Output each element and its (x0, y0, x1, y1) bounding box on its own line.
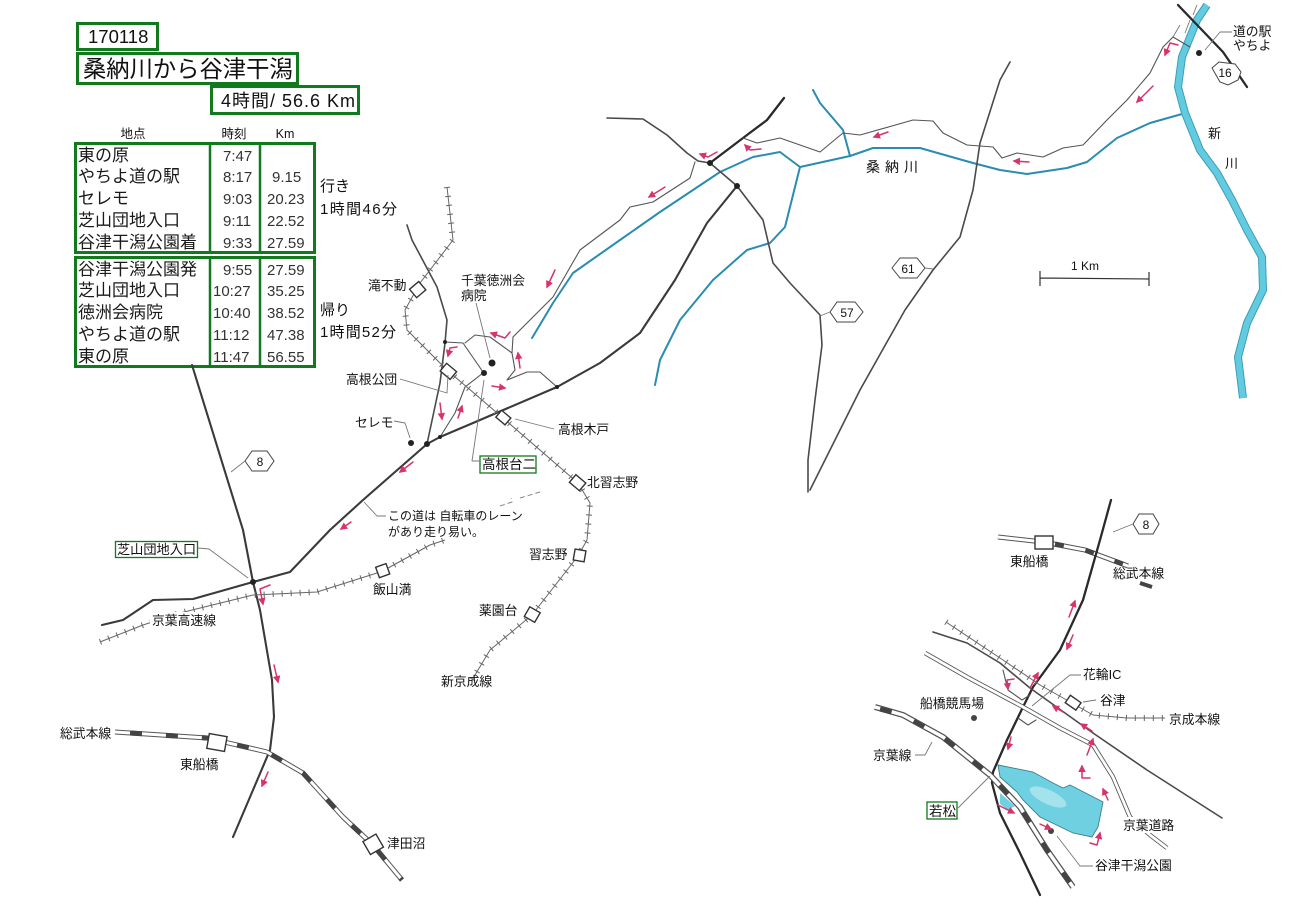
route 57 shield (820, 302, 863, 322)
label: Kita-Narashino: 北習志野 (587, 475, 638, 490)
road: route 16 side lanes (1173, 5, 1197, 37)
route 57 shield: 57 (840, 306, 854, 320)
return table: 35.25 (267, 283, 305, 300)
label: Yatsu (1083, 693, 1126, 708)
outbound duration note (320, 178, 397, 218)
return table: 徳洲会病院 (78, 303, 163, 322)
inset map: Yatsu tidal flat (873, 500, 1222, 895)
label: Sobu line inset: 総武本線 (1113, 566, 1164, 581)
return table: 56.55 (267, 349, 305, 366)
label: Shibayama entrance: 芝山団地入口 (117, 542, 196, 557)
road: diagonal road (933, 632, 1222, 818)
label: Takanedai 2 (472, 380, 536, 473)
outbound table: 7:47 (223, 148, 252, 165)
outbound table: 谷津干潟公園着 (78, 233, 197, 252)
label: Takane Kodan: 高根公団 (346, 372, 397, 387)
label: bike lane note: この道は 自転車のレーン (388, 509, 523, 523)
outbound table: 9:33 (223, 235, 252, 252)
return table: 芝山団地入口 (78, 281, 180, 300)
stations (207, 282, 586, 855)
label: roadside station: 道の駅 (1233, 24, 1272, 39)
label: hospital: 千葉徳洲会 (461, 273, 525, 288)
label: roadside station: やちよ (1233, 38, 1271, 53)
rail: Keiyo line (875, 707, 1073, 887)
label: Yatsu: 谷津 (1100, 693, 1126, 708)
road: thick branch (710, 98, 784, 163)
road: branch to crossing (102, 186, 737, 625)
label: Hanawa IC: 花輪IC (1083, 667, 1121, 682)
date label (78, 24, 158, 50)
road network central (192, 50, 1202, 837)
return table: やちよ道の駅 (78, 325, 180, 344)
road: upper river road (743, 37, 1190, 158)
label: Tsudanuma: 津田沼 (387, 836, 425, 851)
label: Yatsu tidal flat park: 谷津干潟公園 (1095, 858, 1172, 873)
label: Keiyo expressway: 京葉高速線 (152, 613, 216, 628)
scale bar: 1 Km (1071, 259, 1099, 273)
route 8 shield inset (1113, 514, 1159, 534)
return table (76, 257, 314, 367)
road network north (102, 5, 1247, 625)
label: Takanedai 2: 高根台二 (482, 456, 536, 472)
road: along river (512, 162, 695, 353)
railways central (100, 187, 590, 880)
outbound table: セレモ (78, 189, 129, 208)
rivers (532, 5, 1263, 398)
label: hospital: 病院 (461, 288, 487, 303)
label: Narashino: 習志野 (529, 547, 568, 562)
return table: 47.38 (267, 327, 305, 344)
rail: Sobu line inset (998, 536, 1152, 587)
river: Kuwano main (532, 114, 1182, 338)
label: Iiyamaman: 飯山満 (373, 582, 412, 597)
label: Takane Kido: 高根木戸 (558, 422, 609, 437)
label: Keiyo road: 京葉道路 (1123, 818, 1174, 833)
main title: 桑納川から谷津干潟 (83, 56, 293, 82)
label: Funabashi racecourse: 船橋競馬場 (920, 696, 984, 711)
road: route 57 (607, 118, 822, 492)
scale bar (1040, 259, 1149, 286)
park and racecourse markers (971, 715, 1054, 834)
rail: Shin-Keisei line (405, 187, 590, 680)
table headers: Km (276, 127, 294, 141)
road: Keiyo road (925, 653, 1167, 848)
river: tributary (655, 167, 800, 385)
road: route 8 inset (992, 500, 1111, 895)
label: Hanawa IC (1032, 667, 1121, 706)
route 16 shield (1212, 62, 1241, 85)
return table: 11:47 (213, 349, 249, 366)
label: Taki Fudo: 滝不動 (368, 278, 406, 293)
route 61 shield: 61 (901, 262, 915, 276)
rail: Keisei main line (946, 622, 1165, 718)
label: Takane Kido (515, 419, 609, 437)
label: Yatsu tidal flat park (1057, 836, 1172, 873)
label: Yakuendai: 薬園台 (479, 603, 518, 618)
return table: 27.59 (267, 262, 305, 279)
label: Keisei main line: 京成本線 (1169, 712, 1220, 727)
label: Shin river: 新 (1208, 126, 1221, 141)
label: hospital (461, 273, 525, 358)
lake: Yatsu tidal flat (998, 765, 1103, 837)
junction markers (250, 50, 1202, 585)
return table: 11:12 (213, 327, 249, 344)
label: Sobu main line: 総武本線 (60, 726, 111, 741)
outbound table (76, 143, 314, 253)
road: hospital roads (440, 335, 557, 437)
route 8 shield inset: 8 (1143, 518, 1150, 532)
river: Shin river (1178, 5, 1263, 398)
label: Keiyo line: 京葉線 (873, 748, 912, 763)
outbound table: 27.59 (267, 235, 305, 252)
label: bike lane note (364, 492, 540, 539)
label: Shin river (1208, 126, 1238, 171)
label: Wakamatsu (927, 776, 990, 819)
outbound table: 9:11 (223, 213, 251, 230)
duration and distance (212, 86, 358, 114)
label: Kuwano river: 桑納川 (866, 159, 923, 175)
label: roadside station (1205, 24, 1272, 53)
rail: Keiyo expressway line (100, 540, 445, 642)
river: small branch (813, 90, 850, 156)
return table: 9:55 (223, 262, 252, 279)
return table: 10:27 (213, 283, 251, 300)
route 8 shield west: 8 (257, 455, 264, 469)
outbound table: 8:17 (223, 169, 252, 186)
table headers (120, 127, 294, 141)
route 8 shield west (231, 451, 274, 472)
table headers: 地点 (120, 127, 146, 141)
central labels (60, 273, 638, 851)
return table: 10:40 (213, 305, 251, 322)
label: Higashi-Funabashi inset: 東船橋 (1010, 554, 1049, 569)
route 61 shield (892, 258, 933, 278)
return duration note: 1時間52分 (320, 324, 396, 341)
outbound duration note: 1時間46分 (320, 201, 397, 218)
outbound duration note: 行き (320, 178, 350, 195)
outbound table: 9.15 (272, 169, 301, 186)
table headers: 時刻 (221, 127, 247, 141)
outbound table: 22.52 (267, 213, 305, 230)
return table: 東の原 (78, 347, 129, 366)
road: Takine north-south (407, 225, 447, 444)
road: route 8 (192, 365, 274, 837)
outbound table: 芝山団地入口 (78, 211, 180, 230)
return table: 谷津干潟公園発 (78, 260, 197, 279)
label: bike lane note: があり走り易い。 (388, 524, 484, 539)
label: Wakamatsu: 若松 (929, 804, 956, 819)
date label: 170118 (88, 26, 148, 47)
return table: 38.52 (267, 305, 305, 322)
label: Seremo: セレモ (355, 415, 393, 430)
title block (78, 24, 358, 114)
road: route 16 (1178, 5, 1247, 87)
duration and distance: 4時間/ 56.6 Km (221, 91, 355, 111)
outbound table: 20.23 (267, 191, 305, 208)
interchange ramps (1003, 670, 1036, 725)
return duration note: 帰り (320, 301, 350, 319)
return duration note (320, 301, 396, 341)
label: Shin-Keisei line: 新京成線 (441, 674, 492, 689)
direction arrows (260, 43, 1178, 845)
outbound table: 東の原 (78, 146, 129, 165)
label: Takane Kodan (346, 372, 448, 393)
label: Higashi-Funabashi: 東船橋 (180, 757, 219, 772)
route 16 shield: 16 (1218, 66, 1232, 80)
time table (76, 127, 397, 367)
outbound table: 9:03 (223, 191, 252, 208)
label: Shin river: 川 (1225, 156, 1238, 171)
outbound table: やちよ道の駅 (78, 167, 180, 186)
label: Seremo (355, 415, 410, 438)
road: route 61 (810, 62, 1010, 490)
label: Keiyo line (873, 742, 932, 763)
rail: Sobu main line (115, 732, 402, 880)
label: Shibayama entrance (116, 542, 248, 578)
